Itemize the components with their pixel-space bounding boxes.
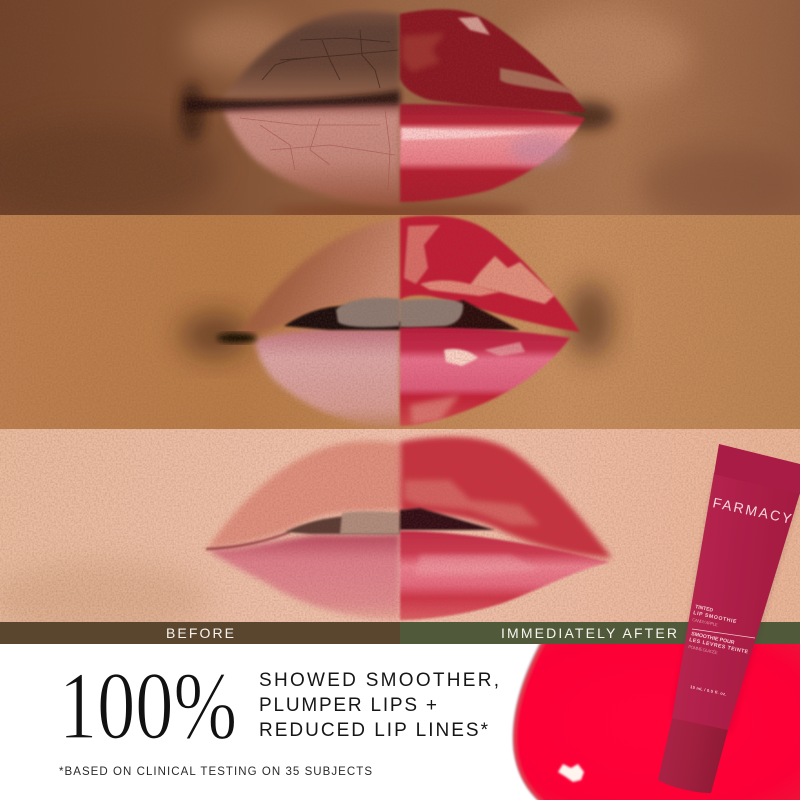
label bar: immediately after bbox=[400, 622, 800, 644]
label bar: before bbox=[0, 622, 400, 644]
tube label: TINTED bbox=[695, 604, 714, 614]
claim text: REDUCED LIP LINES* bbox=[259, 720, 489, 741]
lips after: upper bbox=[400, 9, 586, 112]
mouth and teeth before bbox=[285, 511, 400, 534]
lips before: upper bbox=[208, 441, 400, 548]
mouth after bbox=[400, 508, 495, 530]
lip cracks before bbox=[262, 30, 398, 88]
tube crimp bbox=[714, 444, 800, 494]
lips before: lower bbox=[255, 328, 400, 428]
statistic: 100%: 100% bbox=[59, 652, 237, 759]
lips after: lower bbox=[400, 531, 610, 620]
lips after: lower bbox=[400, 104, 585, 202]
mouth line before bbox=[185, 90, 400, 112]
mouth and teeth before bbox=[217, 298, 400, 343]
tube label: POMME GLACÉE bbox=[688, 644, 718, 655]
lower lip cracks before bbox=[240, 110, 395, 190]
tube label: LIP SMOOTHIE bbox=[693, 610, 737, 625]
tube label: LES LEVRES TEINTE bbox=[689, 637, 749, 656]
tube body bbox=[672, 473, 800, 730]
lips before: lower bbox=[222, 100, 400, 206]
tube shadow bbox=[672, 474, 800, 732]
tube label bbox=[688, 604, 749, 697]
claim text: SHOWED SMOOTHER, bbox=[259, 670, 499, 691]
mouth and teeth after bbox=[400, 299, 520, 330]
panel: light skin tone lips before and after bbox=[0, 429, 800, 640]
product tube bbox=[658, 444, 800, 793]
panel: deep skin tone lips before and after bbox=[0, 0, 800, 225]
tube label: CANDY APPLE bbox=[692, 617, 718, 627]
claim text: PLUMPER LIPS + bbox=[259, 695, 437, 716]
gel highlight bbox=[558, 764, 584, 782]
noise skin texture overlay bbox=[0, 0, 800, 622]
panel: medium skin tone lips before and after bbox=[0, 215, 800, 429]
claim text bbox=[259, 670, 499, 741]
lips after: upper bbox=[400, 216, 580, 332]
lips after: lower bbox=[400, 327, 570, 426]
lips before: upper bbox=[220, 11, 400, 102]
footnote: *BASED ON CLINICAL TESTING ON 35 SUBJECTS bbox=[59, 766, 372, 778]
lips before: upper bbox=[238, 218, 400, 335]
lips before: lower bbox=[208, 534, 400, 620]
mouth corner line before bbox=[206, 532, 290, 549]
product gel swatch bbox=[512, 642, 800, 800]
label bar: immediately after: IMMEDIATELY AFTER bbox=[501, 625, 677, 641]
tube cap bbox=[658, 718, 728, 793]
tube label: 15 mL / 0.5 fl. oz. bbox=[690, 684, 727, 697]
brand name: FARMACY bbox=[711, 494, 794, 527]
label bar: before: BEFORE bbox=[166, 625, 234, 641]
tube label: SMOOTHIE POUR bbox=[691, 631, 735, 646]
lips after: upper bbox=[400, 437, 612, 558]
